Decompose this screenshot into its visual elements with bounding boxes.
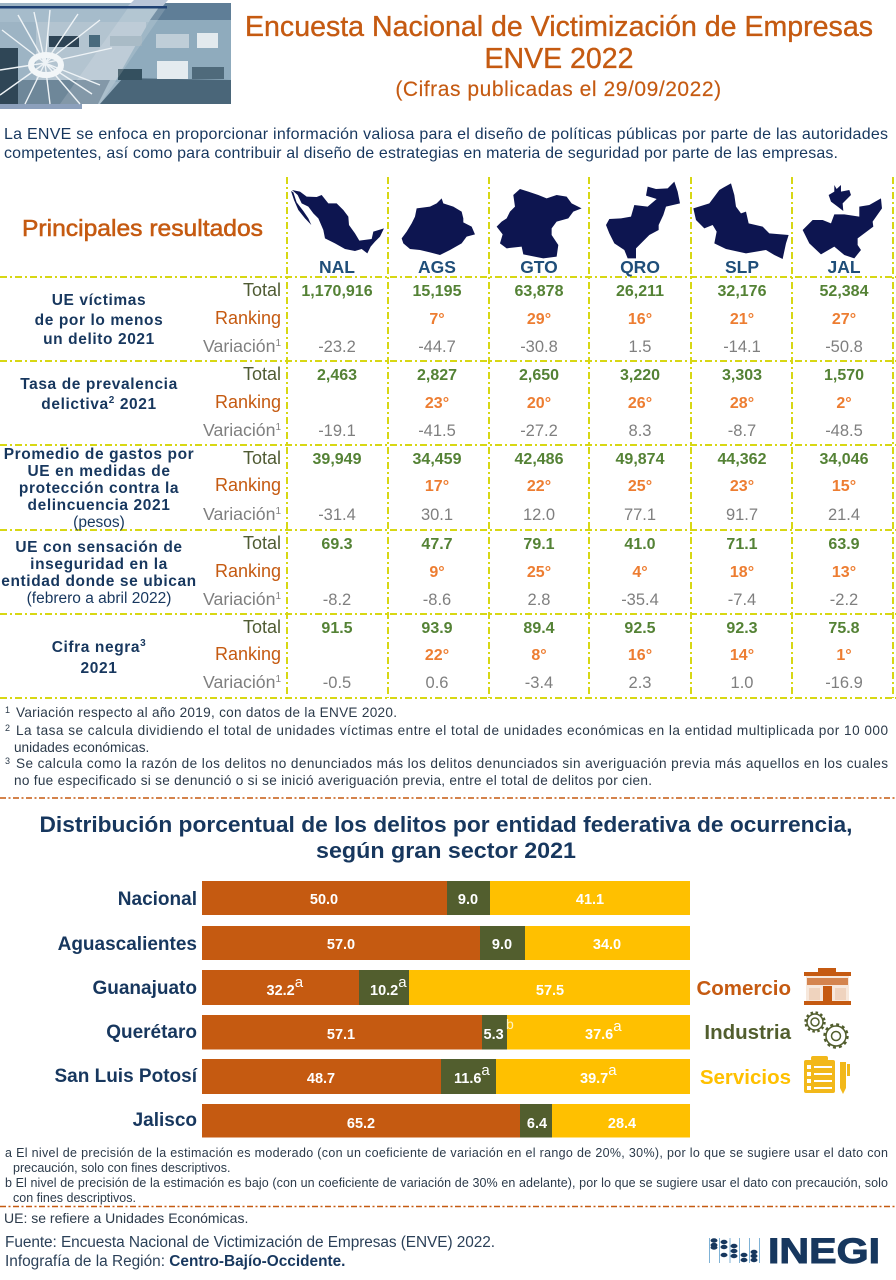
row: UE victimas: 26,211 (616, 283, 664, 300)
row: promedio de gastos: UE en medidas de (27, 463, 171, 480)
row: tasa de prevalencia: -19.1 (318, 422, 356, 440)
bar: Guanajuato (92, 970, 690, 1005)
row: sensacion de inseguridad: 1 (275, 591, 281, 602)
row: cifra negra: 93.9 (421, 620, 453, 637)
row: cifra negra: 14° (730, 647, 754, 664)
row: sensacion de inseguridad: (febrero a abril 2022) (27, 590, 171, 607)
row: UE victimas: UE víctimas (52, 292, 146, 309)
row: cifra negra: 91.5 (321, 620, 353, 637)
bar: San Luis Potosi: San Luis Potosí (54, 1066, 198, 1087)
row: UE victimas: -44.7 (418, 338, 456, 356)
row: sensacion de inseguridad: 18° (730, 564, 754, 581)
footnotes: no fue especificado si se denunció o si se inició averiguación previa, entre el total de delitos por cien. (14, 773, 652, 788)
row: cifra negra: 16° (628, 647, 652, 664)
map: Aguascalientes (402, 198, 475, 255)
column headers: NAL (319, 257, 355, 277)
bar: Guanajuato: 32.2 (266, 983, 295, 999)
row: tasa de prevalencia: 20° (527, 395, 551, 412)
row: cifra negra: -0.5 (323, 674, 351, 692)
row: cifra negra: 22° (425, 647, 449, 664)
bar: Queretaro: b (506, 1016, 514, 1032)
row: tasa de prevalencia (20, 364, 864, 440)
bar: Aguascalientes: 9.0 (492, 937, 512, 953)
row: cifra negra (52, 617, 863, 692)
row: cifra negra: Total (243, 617, 281, 637)
row: tasa de prevalencia: 2 (109, 395, 115, 406)
chart notes: b El nivel de precisión de la estimación es bajo (con un coeficiente de variación de 30% en adelante), por lo que se sugiere usar el dato con precaución, solo (5, 1176, 888, 1190)
row: UE victimas: 15,195 (413, 283, 462, 300)
bar: Nacional: 41.1 (576, 892, 604, 908)
row: tasa de prevalencia: 26° (628, 395, 652, 412)
INEGI logo: INEGI (768, 1232, 880, 1271)
row: UE victimas: 1 (275, 338, 281, 349)
map: Mexico (NAL) (291, 190, 384, 253)
row: promedio de gastos: 34,459 (413, 451, 462, 468)
bar: Nacional: 9.0 (458, 892, 478, 908)
title: ENVE 2022 (485, 43, 633, 75)
row: promedio de gastos: 15° (832, 478, 856, 495)
row: sensacion de inseguridad: inseguridad en la (30, 556, 168, 573)
row: cifra negra: 1° (836, 647, 852, 664)
row: UE victimas: 63,878 (515, 283, 564, 300)
row: cifra negra: 92.5 (624, 620, 656, 637)
row: tasa de prevalencia: Variación (203, 420, 275, 440)
row: tasa de prevalencia: 2,827 (417, 367, 457, 384)
bar: Jalisco: 6.4 (527, 1116, 547, 1132)
chart heading: Distribución porcentual de los delitos por entidad federativa de ocurrencia, (40, 812, 852, 837)
footnotes: La tasa se calcula dividiendo el total de unidades víctimas entre el total de unidades económicas en la entidad multiplicada por 10 000 (16, 723, 888, 738)
row: tasa de prevalencia: delictiva (41, 396, 109, 413)
row: UE victimas: 1.5 (629, 338, 651, 356)
row: sensacion de inseguridad: -2.2 (830, 591, 858, 609)
row: sensacion de inseguridad: Variación (203, 589, 275, 609)
bar: Aguascalientes (58, 926, 690, 960)
row: promedio de gastos (4, 446, 869, 531)
chart notes: a El nivel de precisión de la estimación es moderado (con un coeficiente de variación en el rango de 20%, 30%), por lo que se sugiere usar el dato con (5, 1146, 888, 1160)
column headers: SLP (725, 257, 759, 277)
row: tasa de prevalencia: -27.2 (520, 422, 558, 440)
row: tasa de prevalencia: 1,570 (824, 367, 864, 384)
row: cifra negra: 92.3 (726, 620, 758, 637)
row: promedio de gastos: 1 (275, 506, 281, 517)
intro paragraph: La ENVE se enfoca en proporcionar información valiosa para el diseño de políticas públicas por parte de las autoridades (4, 126, 888, 143)
row: cifra negra: 3 (140, 638, 146, 649)
row: promedio de gastos: 25° (628, 478, 652, 495)
row: cifra negra: 89.4 (523, 620, 555, 637)
row: tasa de prevalencia: 2,463 (317, 367, 357, 384)
row: cifra negra: -16.9 (825, 674, 863, 692)
row: promedio de gastos: Ranking (215, 475, 281, 495)
row: sensacion de inseguridad: 63.9 (828, 536, 860, 553)
row: cifra negra: 2021 (81, 660, 117, 677)
row: UE victimas: 1,170,916 (301, 283, 373, 300)
footnotes: 1 (5, 705, 10, 715)
row: tasa de prevalencia: 28° (730, 395, 754, 412)
row: UE victimas: 27° (832, 311, 856, 328)
row: sensacion de inseguridad: -35.4 (621, 591, 659, 609)
row: sensacion de inseguridad: Ranking (215, 561, 281, 581)
row: cifra negra: 8° (531, 647, 547, 664)
row: cifra negra: -3.4 (525, 674, 553, 692)
row: tasa de prevalencia: 3,220 (620, 367, 660, 384)
column headers: JAL (827, 257, 861, 277)
map: Queretaro (606, 182, 680, 258)
abbreviation note: UE: se refiere a Unidades Económicas. (4, 1210, 248, 1226)
row: promedio de gastos: 17° (425, 478, 449, 495)
footnotes: Variación respecto al año 2019, con datos de la ENVE 2020. (16, 705, 397, 720)
column headers: QRO (620, 257, 660, 277)
row: promedio de gastos: 49,874 (616, 451, 665, 468)
bar: San Luis Potosi: a (481, 1062, 490, 1079)
source: Infografía de la Región: Centro-Bajío-Occidente. (5, 1253, 345, 1270)
row: sensacion de inseguridad: 2.8 (528, 591, 550, 609)
row: tasa de prevalencia: -8.7 (728, 422, 756, 440)
row: cifra negra: 75.8 (828, 620, 860, 637)
row: promedio de gastos: 12.0 (523, 506, 555, 524)
row: promedio de gastos: 39,949 (313, 451, 362, 468)
intro paragraph: competentes, así como para contribuir al diseño de estrategias en materia de seguridad por parte de las empresas. (4, 145, 838, 162)
footnotes: 3 (5, 756, 10, 766)
bar: Nacional: Nacional (118, 889, 197, 910)
bar: Nacional (118, 881, 690, 915)
icon: clipboard and pen (804, 1056, 850, 1094)
row: promedio de gastos: 77.1 (624, 506, 656, 524)
row: sensacion de inseguridad: entidad donde se ubican (1, 573, 197, 590)
stacked bar chart (54, 881, 690, 1138)
column headers (319, 257, 861, 277)
bar: Jalisco: 28.4 (608, 1116, 636, 1132)
row: promedio de gastos: 91.7 (726, 506, 758, 524)
row: sensacion de inseguridad (1, 533, 860, 609)
footnotes: unidades económicas. (14, 740, 149, 755)
row: promedio de gastos: protección contra la (19, 480, 179, 497)
bar: Guanajuato: Guanajuato (92, 978, 197, 999)
row: tasa de prevalencia: 2° (836, 395, 852, 412)
bar: Queretaro: 37.6 (585, 1027, 613, 1043)
row: tasa de prevalencia: 23° (425, 395, 449, 412)
row: sensacion de inseguridad: -8.6 (423, 591, 451, 609)
row: sensacion de inseguridad: 47.7 (421, 536, 453, 553)
row: tasa de prevalencia: 2,650 (519, 367, 559, 384)
row: promedio de gastos: 23° (730, 478, 754, 495)
row: sensacion de inseguridad: 9° (429, 564, 445, 581)
row: tasa de prevalencia: 8.3 (629, 422, 651, 440)
row: sensacion de inseguridad: 41.0 (624, 536, 656, 553)
INEGI logo (710, 1232, 880, 1271)
row: promedio de gastos: delincuencia 2021 (28, 497, 170, 514)
bar: San Luis Potosi: 39.7 (580, 1071, 608, 1087)
row: UE victimas: -30.8 (520, 338, 558, 356)
bar: Queretaro (106, 1015, 690, 1050)
row: UE victimas (35, 280, 869, 356)
row: promedio de gastos: 42,486 (515, 451, 564, 468)
icon: gears (806, 1012, 848, 1048)
column headers: AGS (418, 257, 456, 277)
bar: Jalisco (133, 1104, 690, 1138)
row: sensacion de inseguridad: UE con sensación de (15, 539, 183, 556)
row: tasa de prevalencia: Total (243, 364, 281, 384)
row: cifra negra: Ranking (215, 644, 281, 664)
row: cifra negra: Cifra negra (52, 639, 140, 656)
row: sensacion de inseguridad: -8.2 (323, 591, 351, 609)
row: promedio de gastos: 21.4 (828, 506, 860, 524)
row: UE victimas: -23.2 (318, 338, 356, 356)
legend: servicios (700, 1056, 850, 1094)
row: cifra negra: Variación (203, 672, 275, 692)
bar: San Luis Potosi: 11.6 (454, 1071, 481, 1087)
intro paragraph (4, 126, 888, 162)
row: UE victimas: Total (243, 280, 281, 300)
row: promedio de gastos: 44,362 (718, 451, 767, 468)
row: UE victimas: 21° (730, 311, 754, 328)
row: sensacion de inseguridad: 4° (632, 564, 648, 581)
chart heading (40, 812, 852, 863)
row: UE victimas: Ranking (215, 308, 281, 328)
bar: Nacional: 50.0 (310, 892, 338, 908)
row: tasa de prevalencia: 2021 (115, 396, 157, 413)
row: tasa de prevalencia: -48.5 (825, 422, 863, 440)
row: cifra negra: 0.6 (426, 674, 448, 692)
bar: Guanajuato: 10.2 (370, 983, 398, 999)
bar: Queretaro: a (613, 1018, 622, 1035)
source: Fuente: Encuesta Nacional de Victimización de Empresas (ENVE) 2022. (5, 1234, 495, 1251)
bar: Jalisco: Jalisco (133, 1110, 197, 1131)
title: (Cifras publicadas el 29/09/2022) (395, 78, 722, 101)
row: UE victimas: Variación (203, 336, 275, 356)
row: sensacion de inseguridad: 71.1 (726, 536, 758, 553)
row: tasa de prevalencia: -41.5 (418, 422, 456, 440)
title: Encuesta Nacional de Victimización de Empresas (245, 11, 873, 43)
row: cifra negra: 2.3 (629, 674, 651, 692)
bar: San Luis Potosi: 48.7 (307, 1071, 335, 1087)
bar: Queretaro: Querétaro (106, 1022, 197, 1043)
icon: store (804, 968, 851, 1005)
bar: Guanajuato: a (295, 974, 304, 991)
header photo: shattered glass over industrial building (0, 0, 231, 109)
legend: industria: Industria (704, 1021, 792, 1044)
bar: Guanajuato: a (398, 974, 407, 991)
footnotes (5, 705, 888, 788)
bar: San Luis Potosi (54, 1059, 690, 1094)
legend: industria (704, 1012, 848, 1048)
row: sensacion de inseguridad: 79.1 (523, 536, 555, 553)
row: UE victimas: 52,384 (820, 283, 869, 300)
row: UE victimas: 29° (527, 311, 551, 328)
legend: servicios: Servicios (700, 1066, 791, 1089)
row: UE victimas: -14.1 (723, 338, 761, 356)
chart notes (5, 1146, 888, 1205)
map: Guanajuato (497, 189, 582, 258)
bar: Guanajuato: 57.5 (536, 983, 564, 999)
legend: comercio (696, 968, 851, 1005)
bar: Aguascalientes: 57.0 (327, 937, 355, 953)
row: sensacion de inseguridad: 25° (527, 564, 551, 581)
row: UE victimas: un delito 2021 (43, 331, 155, 348)
column headers: GTO (520, 257, 558, 277)
bar: Jalisco: 65.2 (347, 1116, 375, 1132)
map: Jalisco (803, 185, 882, 258)
chart heading: según gran sector 2021 (316, 838, 576, 863)
row: UE victimas: 32,176 (718, 283, 767, 300)
row: promedio de gastos: (pesos) (73, 514, 125, 531)
row: tasa de prevalencia: Ranking (215, 392, 281, 412)
title (245, 11, 873, 101)
map: San Luis Potosi (693, 183, 789, 259)
row: promedio de gastos: 30.1 (421, 506, 453, 524)
heading: principales resultados: Principales resultados (22, 215, 263, 241)
row: cifra negra: 1.0 (731, 674, 753, 692)
bar: Queretaro: 57.1 (327, 1027, 355, 1043)
row: promedio de gastos: 22° (527, 478, 551, 495)
row: UE victimas: 16° (628, 311, 652, 328)
chart notes: precaución, solo con fines descriptivos. (13, 1161, 230, 1175)
footnotes: Se calcula como la razón de los delitos no denunciados más los delitos denunciados sin averiguación previa más aquellos en los cuales (16, 756, 888, 771)
row: sensacion de inseguridad: Total (243, 533, 281, 553)
row: cifra negra: 1 (275, 674, 281, 685)
footnotes: 2 (5, 723, 10, 733)
bar: Aguascalientes: Aguascalientes (58, 934, 197, 955)
row: sensacion de inseguridad: -7.4 (728, 591, 756, 609)
chart notes: con fines descriptivos. (13, 1191, 136, 1205)
row: promedio de gastos: -31.4 (318, 506, 356, 524)
row: promedio de gastos: 34,046 (820, 451, 869, 468)
bar: Aguascalientes: 34.0 (593, 937, 621, 953)
row: tasa de prevalencia: Tasa de prevalencia (20, 376, 178, 393)
row: promedio de gastos: Variación (203, 504, 275, 524)
row: sensacion de inseguridad: 69.3 (321, 536, 353, 553)
row: tasa de prevalencia: 1 (275, 422, 281, 433)
source (5, 1234, 495, 1270)
row: UE victimas: 7° (429, 311, 445, 328)
row: sensacion de inseguridad: 13° (832, 564, 856, 581)
row: UE victimas: de por lo menos (35, 312, 163, 329)
row: promedio de gastos: Promedio de gastos por (4, 446, 194, 463)
row: tasa de prevalencia: 3,303 (722, 367, 762, 384)
bar: San Luis Potosi: a (608, 1062, 617, 1079)
legend: comercio: Comercio (696, 977, 791, 1000)
bar: Queretaro: 5.3 (484, 1027, 504, 1043)
row: UE victimas: -50.8 (825, 338, 863, 356)
results table grid (0, 177, 896, 698)
row: promedio de gastos: Total (243, 448, 281, 468)
